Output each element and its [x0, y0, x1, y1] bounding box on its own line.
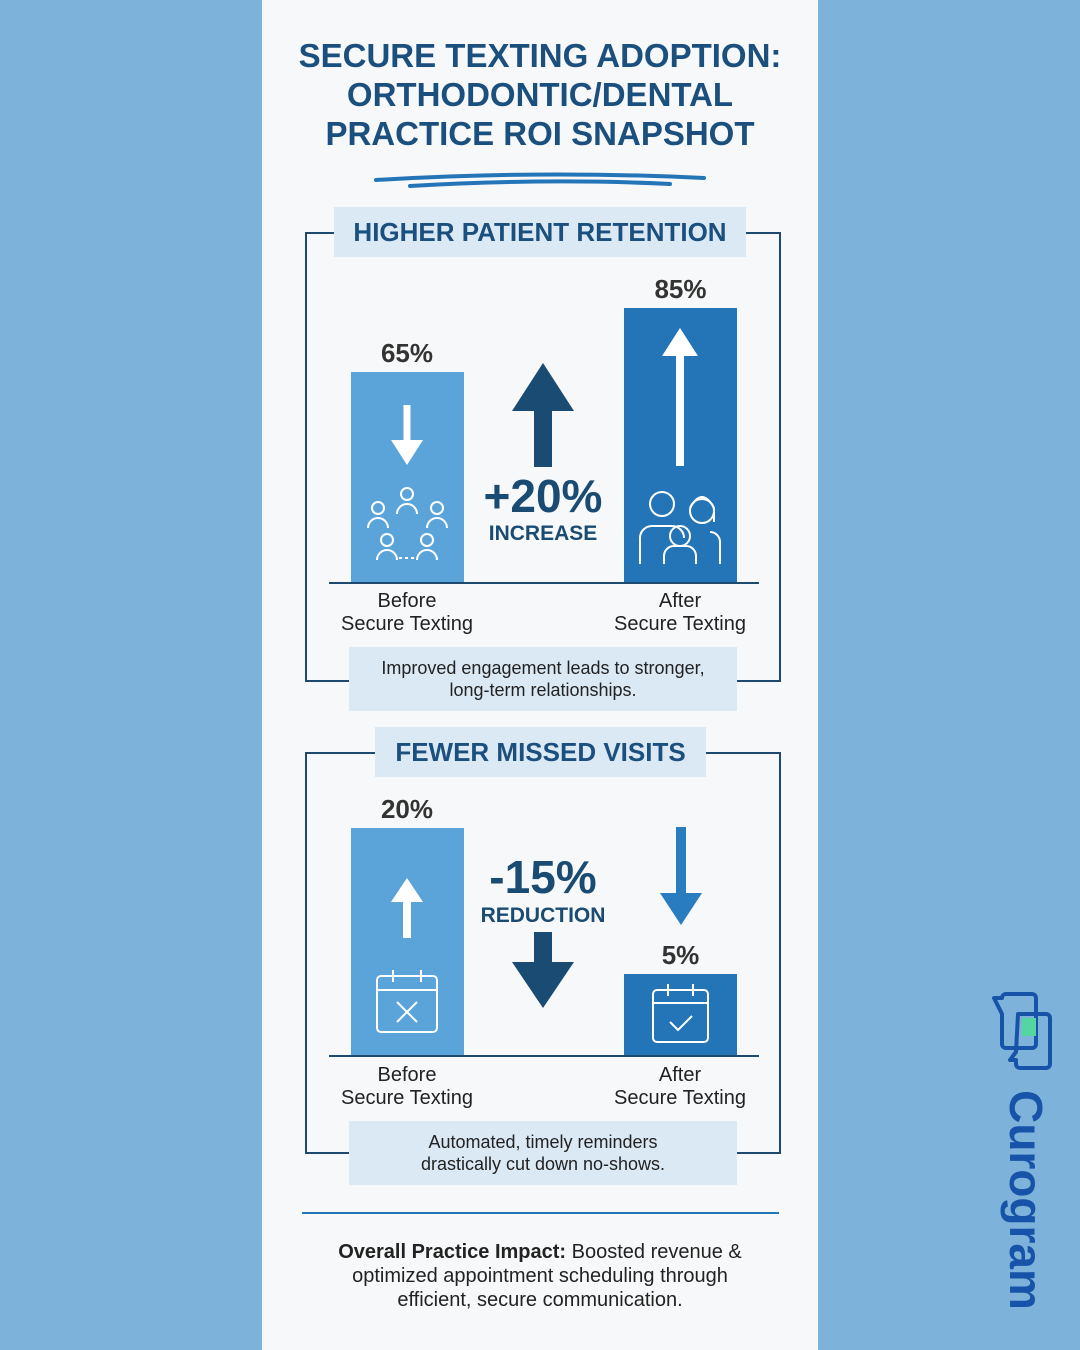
arrow down light: [660, 827, 702, 925]
baseline 2: [329, 1055, 759, 1057]
label before 2: Before: [378, 1064, 436, 1086]
label after 2: Secure Texting: [614, 1087, 746, 1109]
caption missed: [349, 1121, 737, 1185]
divider: [302, 1212, 779, 1214]
title: ORTHODONTIC/DENTAL: [347, 76, 733, 113]
caption retention: long-term relationships.: [449, 680, 637, 700]
+20% increase: +20%: [484, 470, 602, 522]
bar: before retention: [351, 372, 464, 583]
arrow down: [512, 932, 574, 1008]
logo text: Curogram: [1000, 1090, 1052, 1310]
-15% reduction: -15%: [489, 851, 597, 903]
title: PRACTICE ROI SNAPSHOT: [325, 115, 755, 152]
caption retention: Improved engagement leads to stronger,: [381, 658, 705, 678]
arrow up: [512, 363, 574, 467]
title: [299, 37, 781, 152]
center card: [262, 0, 818, 1350]
bar: before missed: [351, 828, 464, 1056]
bar: after retention: [624, 308, 737, 583]
caption missed: drastically cut down no-shows.: [421, 1154, 665, 1174]
heading: retention: [334, 207, 746, 257]
label after: Secure Texting: [614, 613, 746, 635]
label before: Secure Texting: [341, 613, 473, 635]
value 20%: 20%: [381, 794, 433, 824]
+20% increase: INCREASE: [489, 522, 597, 545]
logo icon: [992, 992, 1052, 1070]
caption missed: Automated, timely reminders: [428, 1132, 658, 1152]
label before: [341, 590, 473, 635]
heading: missed visits: [375, 727, 706, 777]
footer text: optimized appointment scheduling through: [352, 1265, 728, 1287]
label after: After: [659, 590, 701, 612]
panel: missed visits frame: [305, 752, 781, 1154]
value 65%: 65%: [381, 338, 433, 368]
caption retention: [349, 647, 737, 711]
panel: retention frame: [305, 232, 781, 682]
-15% reduction: [481, 851, 605, 927]
title underline: [374, 172, 706, 188]
label after 2: [614, 1064, 746, 1109]
footer text: efficient, secure communication.: [397, 1289, 683, 1311]
bar: after missed: [624, 974, 737, 1056]
title: SECURE TEXTING ADOPTION:: [299, 37, 781, 74]
label after 2: After: [659, 1064, 701, 1086]
+20% increase: [484, 470, 602, 545]
heading: retention: HIGHER PATIENT RETENTION: [353, 217, 727, 247]
heading: missed visits: FEWER MISSED VISITS: [395, 737, 686, 767]
label after: [614, 590, 746, 635]
value 5%: 5%: [662, 940, 699, 970]
footer text: [338, 1241, 742, 1311]
label before: Before: [378, 590, 436, 612]
label before 2: [341, 1064, 473, 1109]
-15% reduction: REDUCTION: [481, 904, 605, 927]
footer text: Overall Practice Impact: Boosted revenue &: [338, 1241, 742, 1263]
baseline: [329, 582, 759, 584]
label before 2: Secure Texting: [341, 1087, 473, 1109]
value 85%: 85%: [654, 274, 707, 304]
